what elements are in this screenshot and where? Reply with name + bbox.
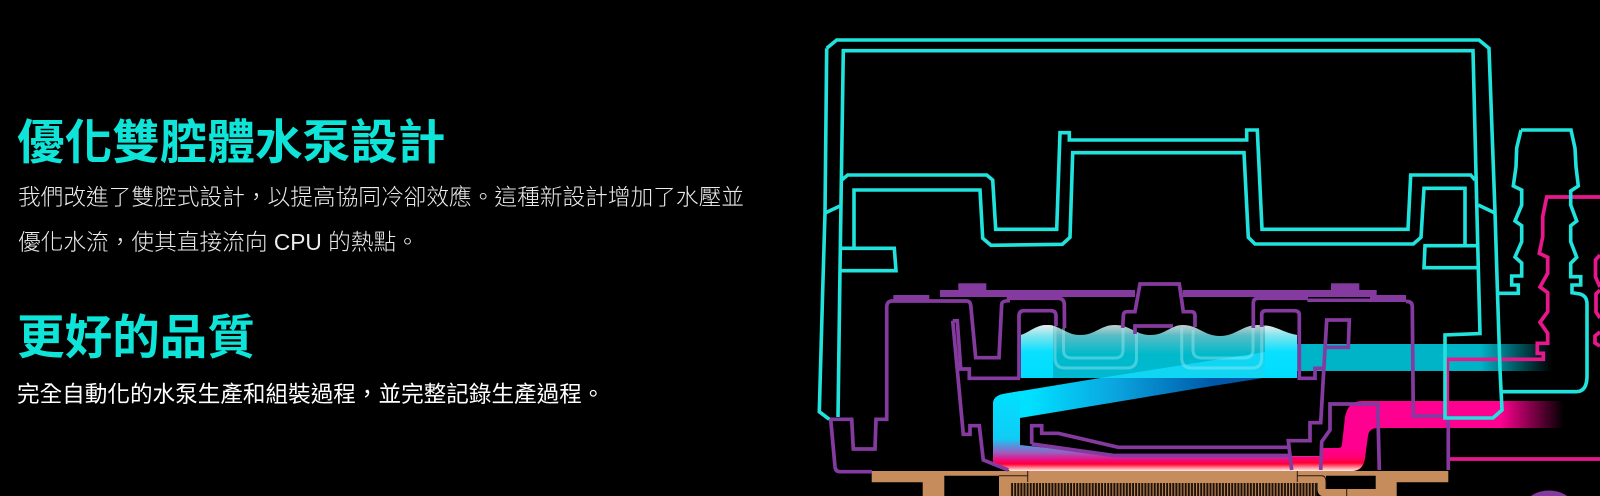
- heated cold-plate strip: [993, 391, 1322, 471]
- cold flow duct: [993, 378, 1263, 445]
- cold outflow band: [1297, 344, 1552, 371]
- pink hose fitting: [1447, 197, 1600, 459]
- heading: optimized dual-chamber pump design: 優化雙腔體水泵設計: [17, 117, 445, 170]
- text block: dual-chamber description line 1: 我們改進了雙腔式設計，以提高協同冷卻效應。這種新設計增加了水壓並: [18, 184, 744, 210]
- text block: dual-chamber description line 2: 優化水流，使其直接流向 CPU 的熱點。: [18, 229, 419, 255]
- purple housing lines: [831, 284, 1448, 472]
- teal lower-housing and hose fitting: [819, 40, 1587, 419]
- hot strip right end: [1291, 448, 1366, 471]
- text block: quality description: 完全自動化的水泵生產和組裝過程，並完整記錄生產過程。: [17, 382, 604, 407]
- purple top plate and bumps: [893, 283, 1406, 302]
- water chamber with waves: [1021, 325, 1297, 378]
- copper cold plate: [872, 471, 1448, 496]
- purple ellipse at bottom right: [1526, 490, 1572, 496]
- hot pink channel: [1321, 401, 1564, 471]
- heading: better quality: 更好的品質: [17, 312, 255, 365]
